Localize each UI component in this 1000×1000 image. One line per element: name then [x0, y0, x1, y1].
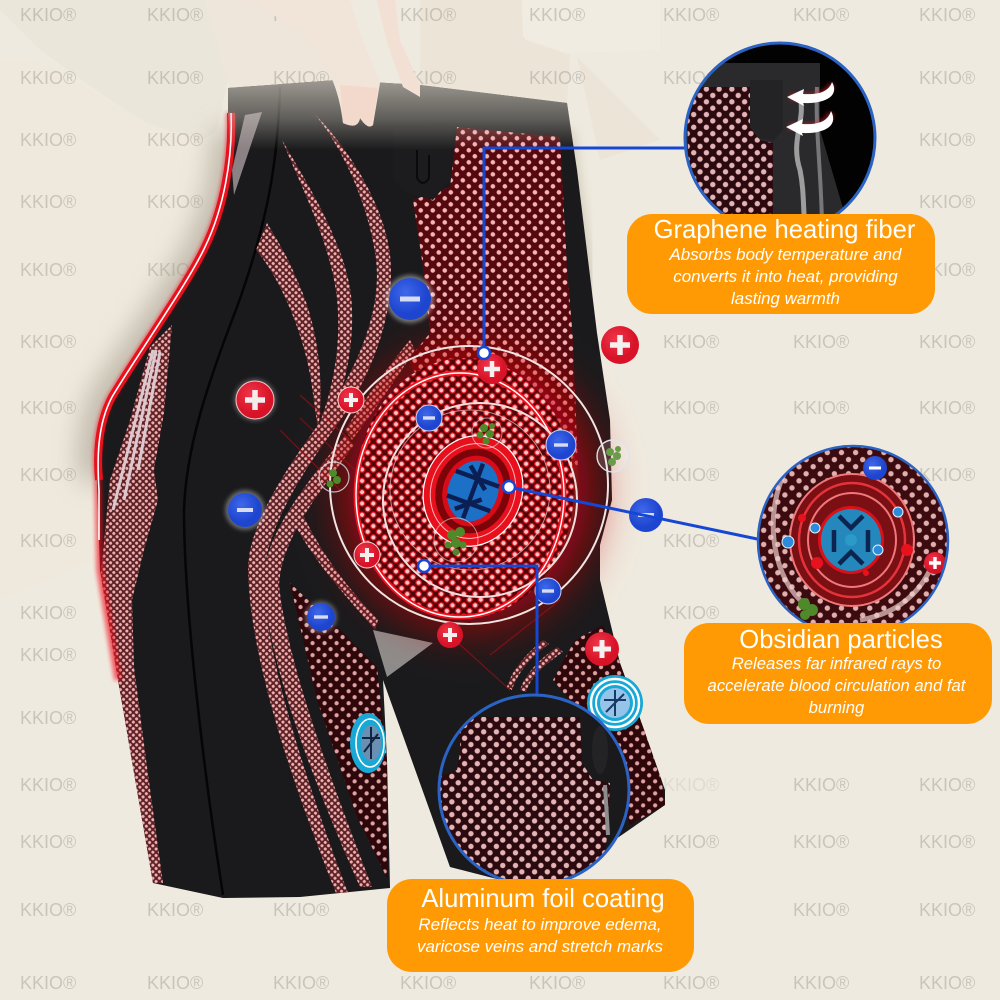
callout: aluminum foil coating: Reflects heat to improve edema,	[418, 915, 662, 934]
side seam	[184, 87, 280, 895]
watermark grid: KKIO®	[919, 192, 975, 212]
watermark grid: KKIO®	[793, 973, 849, 993]
watermark grid: KKIO®	[20, 531, 76, 551]
watermark grid: KKIO®	[919, 260, 975, 280]
callout: graphene heating fiber: Absorbs body temperature and	[669, 245, 902, 264]
central heat zone	[280, 332, 613, 690]
callout: obsidian particles: burning	[809, 698, 865, 717]
watermark grid: KKIO®	[273, 900, 329, 920]
watermark grid: KKIO®	[400, 973, 456, 993]
detail circle: obsidian particles	[758, 446, 948, 636]
watermark grid: KKIO®	[663, 775, 719, 795]
watermark grid: KKIO®	[20, 465, 76, 485]
watermark grid: KKIO®	[663, 465, 719, 485]
pale arcs	[773, 470, 930, 620]
watermark grid: KKIO®	[400, 68, 456, 88]
obsidian core rings	[408, 422, 538, 560]
watermark grid: KKIO®	[919, 68, 975, 88]
hand fingers	[243, 0, 420, 126]
leg emblems	[350, 675, 643, 773]
watermark grid: KKIO®	[273, 5, 329, 25]
watermark grid: KKIO®	[20, 130, 76, 150]
watermark grid: KKIO®	[273, 973, 329, 993]
watermark grid: KKIO®	[663, 398, 719, 418]
icon: stretch arrows	[786, 82, 834, 136]
watermark grid: KKIO®	[20, 68, 76, 88]
watermark grid: KKIO®	[20, 603, 76, 623]
callout: obsidian particles	[684, 623, 992, 724]
red hip glow	[97, 113, 230, 680]
watermark grid: KKIO®	[793, 465, 849, 485]
callout: graphene heating fiber: Graphene heating fiber	[654, 216, 916, 244]
detail circle: waist tab	[684, 42, 876, 214]
watermark grid: KKIO®	[919, 832, 975, 852]
lower dotted panel	[290, 583, 388, 880]
callout: graphene heating fiber: converts it into heat, providing	[673, 267, 898, 286]
red diagonal lines	[280, 395, 560, 690]
watermark grid: KKIO®	[663, 5, 719, 25]
shorts silhouette	[96, 80, 665, 898]
watermark grid: KKIO®	[919, 5, 975, 25]
crotch gusset	[373, 630, 433, 677]
mineral bubbles	[319, 418, 629, 562]
watermark grid: KKIO®	[663, 603, 719, 623]
waist haze	[228, 80, 573, 146]
watermark grid: KKIO®	[919, 130, 975, 150]
watermark grid: KKIO®	[147, 973, 203, 993]
watermark grid: KKIO®	[20, 260, 76, 280]
positive ions	[234, 326, 639, 666]
watermark grid: KKIO®	[663, 332, 719, 352]
watermark grid: KKIO®	[147, 68, 203, 88]
negative ions	[225, 275, 663, 633]
watermark grid: KKIO®	[273, 68, 329, 88]
watermark grid: KKIO®	[20, 775, 76, 795]
watermark grid: KKIO®	[919, 900, 975, 920]
watermark grid: KKIO®	[793, 5, 849, 25]
left dotted band	[100, 325, 172, 883]
white stripes at hip	[113, 350, 160, 510]
callout: obsidian particles: Releases far infrared rays to	[732, 654, 941, 673]
watermark grid: KKIO®	[919, 465, 975, 485]
watermark grid: KKIO®	[793, 775, 849, 795]
hip shadow	[94, 130, 228, 480]
watermark grid: KKIO®	[20, 5, 76, 25]
detail circle: aluminum foil	[430, 695, 629, 890]
watermark grid: KKIO®	[663, 68, 719, 88]
watermark grid: KKIO®	[529, 68, 585, 88]
watermark grid: KKIO®	[20, 973, 76, 993]
watermark grid: KKIO®	[919, 775, 975, 795]
watermark grid: KKIO®	[147, 900, 203, 920]
watermark grid: KKIO®	[147, 260, 203, 280]
red and white orbit rings	[330, 346, 608, 624]
watermark grid: KKIO®	[793, 332, 849, 352]
watermark grid: KKIO®	[529, 973, 585, 993]
watermark grid: KKIO®	[793, 398, 849, 418]
hip pale stripe	[232, 112, 262, 195]
watermark grid: KKIO®	[20, 398, 76, 418]
callout: aluminum foil coating: Aluminum foil coating	[421, 885, 665, 913]
watermark grid: KKIO®	[793, 832, 849, 852]
dotted stripes	[248, 112, 563, 893]
callout: aluminum foil coating	[387, 879, 694, 972]
watermark grid: KKIO®	[793, 900, 849, 920]
callout: graphene heating fiber	[627, 214, 935, 314]
front dotted panel	[408, 127, 578, 470]
leader lines	[418, 148, 762, 697]
watermark grid: KKIO®	[20, 708, 76, 728]
small particles	[782, 507, 903, 555]
watermark grid: KKIO®	[147, 5, 203, 25]
watermark grid: KKIO®	[919, 973, 975, 993]
callout: graphene heating fiber: lasting warmth	[731, 289, 840, 308]
watermark grid: KKIO®	[400, 5, 456, 25]
watermark grid: KKIO®	[663, 973, 719, 993]
watermark grid: KKIO®	[147, 130, 203, 150]
callout: obsidian particles: Obsidian particles	[739, 626, 943, 654]
callout: obsidian particles: accelerate blood circulation and fat	[708, 676, 967, 695]
watermark grid: KKIO®	[919, 398, 975, 418]
watermark grid: KKIO®	[663, 832, 719, 852]
watermark grid: KKIO®	[20, 900, 76, 920]
shorts interior details	[100, 87, 665, 895]
callout: aluminum foil coating: varicose veins and stretch marks	[417, 937, 664, 956]
watermark grid: KKIO®	[919, 332, 975, 352]
watermark grid: KKIO®	[147, 192, 203, 212]
watermark grid: KKIO®	[20, 332, 76, 352]
watermark grid: KKIO®	[20, 192, 76, 212]
watermark grid: KKIO®	[663, 531, 719, 551]
watermark grid: KKIO®	[529, 5, 585, 25]
watermark grid: KKIO®	[20, 832, 76, 852]
right leg dotted panel	[553, 625, 665, 825]
watermark grid: KKIO®	[20, 645, 76, 665]
waist tab	[393, 127, 453, 200]
